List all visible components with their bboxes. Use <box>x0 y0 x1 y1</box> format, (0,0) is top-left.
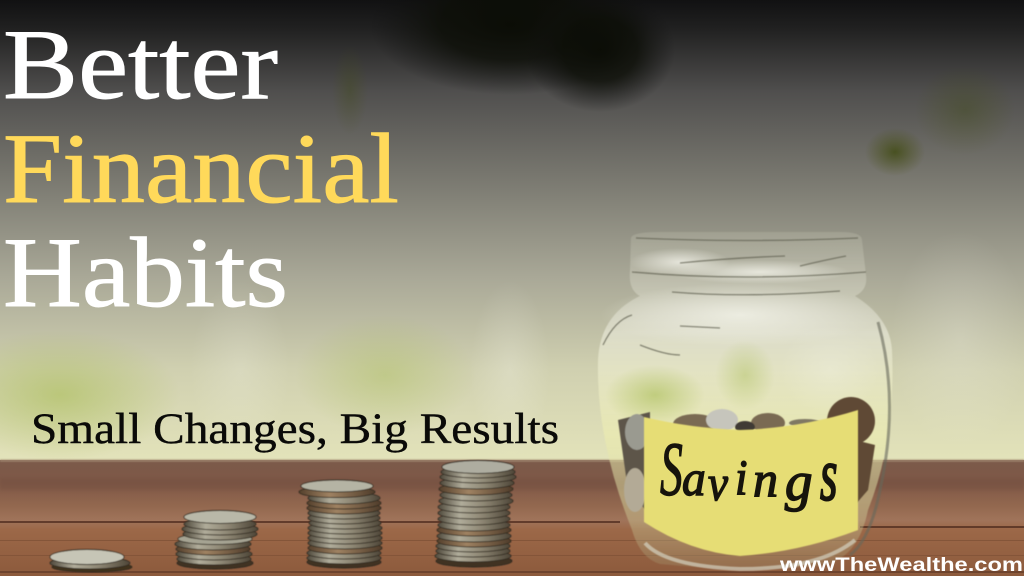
coin stack 1 <box>50 550 132 572</box>
coin stack 2 <box>175 510 258 569</box>
label handwriting: S <box>660 427 683 512</box>
coin stack 4 <box>435 460 516 567</box>
title: Habits: Habits <box>3 217 288 328</box>
title: Better: Better <box>3 9 278 120</box>
jar glass highlights <box>600 248 880 425</box>
jar body <box>598 232 892 569</box>
jar rim and thread lines <box>603 238 866 355</box>
glass jar with coins and savings label <box>598 232 892 569</box>
label handwriting: g <box>785 451 813 512</box>
label handwriting: s <box>820 435 838 517</box>
coins inside jar <box>618 397 875 515</box>
label handwriting: a <box>682 451 706 506</box>
label handwriting: i <box>735 451 748 506</box>
wooden table <box>0 459 1024 576</box>
subtitle: Small Changes, Big Results <box>31 406 559 453</box>
coin stack 3 <box>299 480 382 568</box>
savings label <box>644 410 858 556</box>
label handwriting: n <box>753 451 778 507</box>
label handwriting: v <box>708 457 729 512</box>
title: Financial: Financial <box>3 113 399 224</box>
label handwriting <box>660 427 838 517</box>
website watermark: wwwTheWealthe.com <box>779 554 1023 576</box>
